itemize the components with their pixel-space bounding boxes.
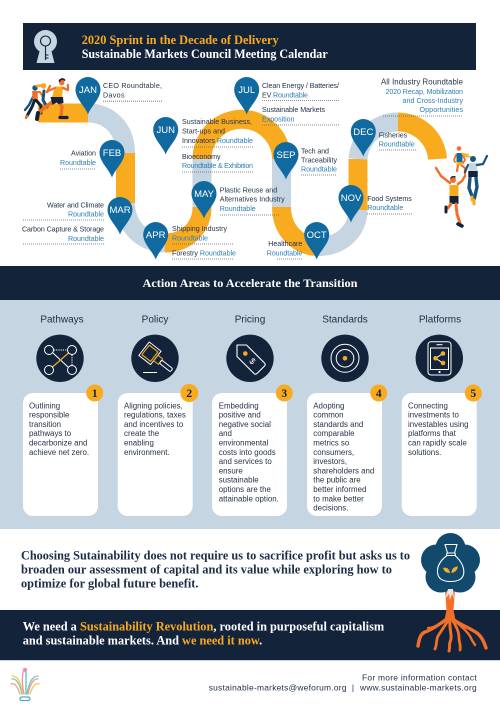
icon: keyhole with key (34, 30, 57, 63)
card text: investments to (408, 411, 459, 420)
pin: FEB: FEB (103, 148, 121, 159)
logo: plume emblem (11, 670, 39, 700)
label: June: Sustainable Business, (182, 118, 252, 126)
card text: environment. (124, 448, 170, 457)
card text: metrics so (313, 438, 350, 448)
label: June (182, 118, 253, 172)
card text: comparable (313, 429, 355, 438)
section band: action areas (0, 266, 500, 300)
card text: standards and (313, 420, 363, 429)
pin: OCT (304, 222, 329, 260)
label: March: Roundtable (68, 235, 104, 243)
column: Pathways (23, 315, 103, 516)
card text: investors, (313, 457, 347, 466)
pin: OCT: OCT (307, 230, 327, 241)
card text: to make better (313, 494, 364, 503)
label: March: Carbon Capture & Storage (22, 226, 104, 234)
month pins (76, 77, 376, 260)
label: July (262, 82, 339, 125)
label: March: Roundtable (68, 211, 104, 219)
label: July: Sustainable Markets (262, 106, 325, 114)
label: all industry roundtable: and Cross-Industry (402, 97, 463, 105)
column: Policy: Policy (142, 315, 168, 326)
illustration: runners at start (25, 79, 68, 119)
label: November: Roundtable (367, 204, 403, 212)
card text: Outlining (29, 401, 60, 410)
label: December: Fisheries (379, 132, 408, 140)
card (307, 393, 382, 516)
pin: JUL (234, 77, 259, 114)
label: December: Roundtable (379, 141, 415, 149)
column: Platforms (402, 315, 482, 516)
label: January (103, 82, 163, 101)
label: September: Roundtable (301, 166, 337, 174)
card text: platforms that (408, 429, 457, 438)
subtitle: Sustainable Markets Council Meeting Calendar (82, 46, 328, 61)
label: March: Water and Climate (47, 201, 104, 209)
number badge (370, 384, 387, 402)
label: July: Clean Energy / Batteries/ (262, 82, 339, 90)
number badge (465, 384, 482, 402)
header banner (23, 23, 476, 70)
label: September: Tech and (301, 147, 329, 155)
pin: MAY (192, 181, 216, 218)
card text: and (219, 429, 232, 438)
statement text: broaden our assessment of capital and its value while exploring how to (21, 562, 392, 576)
label: April: Roundtable (172, 234, 208, 242)
pin: DEC (351, 119, 376, 156)
card text: Adopting (313, 401, 344, 410)
title: 2020 Sprint in the Decade of Delivery (82, 32, 279, 47)
card text: environmental (219, 438, 269, 448)
column: Standards: Standards (322, 315, 368, 326)
footer contact: www.sustainable-markets.org (359, 683, 477, 693)
card text: positive and (219, 411, 261, 420)
label: June: Roundtable & Exhibition (182, 162, 253, 170)
pin: MAR (108, 197, 132, 234)
pin: DEC: DEC (353, 127, 373, 138)
card text: sustainable (219, 476, 259, 485)
label: February: Roundtable (60, 159, 96, 167)
card text: costs into goods (219, 448, 276, 457)
card text: decarbonize and (29, 438, 87, 448)
card text: Connecting (408, 401, 448, 410)
label: January: Davos (103, 92, 125, 100)
pin: MAY: MAY (194, 189, 215, 200)
label: all industry roundtable: 2020 Recap, Mobilization (386, 88, 463, 96)
label: February: Aviation (71, 150, 96, 158)
canopy (421, 533, 480, 592)
card text: Embedding (219, 401, 259, 410)
label: all industry roundtable (381, 78, 463, 116)
statement text (21, 548, 410, 590)
statement text: optimize for global future benefit. (21, 576, 198, 590)
card (212, 393, 287, 516)
card text: attainable option. (219, 494, 279, 503)
label: May (220, 186, 285, 215)
icon: price tag: $ (247, 356, 258, 366)
card text: pathways to (29, 429, 72, 438)
label: May: Roundtable (220, 205, 256, 213)
footer contact: | (352, 683, 354, 693)
statement text: Choosing Sutainability does not require us to sacrifice profit but asks us to (21, 548, 410, 562)
label: all industry roundtable: All Industry Roundtable (381, 78, 463, 87)
illustration: finishing runners (436, 146, 487, 226)
column: Pricing: Pricing (235, 315, 265, 326)
card text: consumers, (313, 448, 354, 457)
pin: NOV: NOV (341, 193, 362, 204)
pin: JUN (153, 117, 178, 154)
number badge: 3 (281, 388, 287, 400)
card text: and services to (219, 457, 272, 466)
label: May: Alternatives Industry (220, 196, 285, 204)
pin: APR (143, 222, 168, 260)
milestone labels (22, 78, 463, 259)
card text: can rapidly scale (408, 438, 467, 448)
label: October: Healthcare (268, 240, 302, 248)
card text: common (313, 411, 344, 420)
call to action text: We need a Sustainability Revolution, rooted in purposeful capitalism (23, 619, 384, 634)
card (118, 393, 193, 516)
card text: and incentives to (124, 420, 184, 429)
footer contact (209, 672, 477, 693)
pin: JAN (76, 77, 100, 114)
footer contact: For more information contact (362, 672, 477, 682)
label: November (367, 195, 412, 214)
illustration: money tree (418, 533, 486, 651)
label: June: Innovators Roundtable (182, 137, 253, 145)
label: June: Start-ups and (182, 128, 225, 136)
pin: JAN: JAN (79, 85, 97, 96)
pin: JUN: JUN (156, 125, 175, 136)
call to action text (23, 619, 384, 648)
card text: transition (29, 420, 61, 429)
panel: action areas (0, 300, 500, 529)
label: September (301, 147, 337, 175)
card text: create the (124, 429, 160, 438)
card text: options are the (219, 485, 272, 494)
icon: money bag (437, 544, 464, 582)
card text: the public are (313, 476, 361, 485)
label: April: Forestry Roundtable (172, 249, 236, 257)
number badge: 5 (470, 388, 476, 400)
pin: JUL: JUL (238, 85, 255, 96)
column: Pricing (212, 315, 293, 516)
number badge (180, 384, 198, 402)
section heading: Action Areas to Accelerate the Transition (142, 278, 358, 290)
column: Policy (118, 315, 198, 516)
card text: regulations, taxes (124, 411, 186, 420)
pin: APR: APR (146, 230, 166, 241)
footer contact: sustainable-markets@weforum.org (209, 683, 347, 693)
number badge (276, 384, 293, 402)
card text: ensure (219, 466, 243, 475)
card text: investables using (408, 420, 469, 429)
icon: gavel (131, 335, 179, 382)
card text: decisions. (313, 504, 348, 513)
pin: SEP: SEP (276, 150, 296, 161)
label: July: Exposition (262, 116, 295, 124)
pin: MAR: MAR (109, 205, 131, 216)
card (402, 393, 477, 516)
icon: pathways network (36, 335, 84, 382)
call to action band (0, 610, 500, 661)
card text: responsible (29, 411, 70, 420)
card text: shareholders and (313, 466, 374, 475)
icon: price tag (226, 335, 274, 382)
timeline road (38, 113, 438, 246)
number badge: 2 (186, 388, 192, 400)
label: January: CEO Roundtable, (103, 82, 162, 90)
roots (418, 590, 486, 651)
icon: phone sharing (416, 335, 463, 382)
column: Standards (307, 315, 387, 516)
pin: SEP (274, 142, 298, 180)
label: June: Bioeconomy (182, 153, 221, 161)
label: April: Shipping Industry (172, 225, 227, 233)
column: Pathways: Pathways (40, 315, 84, 326)
label: May: Plastic Reuse and (220, 186, 277, 194)
card text: enabling (124, 438, 154, 448)
label: December (379, 132, 416, 150)
number badge: 1 (92, 388, 98, 400)
pin: NOV (338, 185, 364, 222)
label: February (60, 150, 96, 169)
call to action text: and sustainable markets. And we need it now. (23, 633, 262, 648)
label: September: Traceability (301, 157, 337, 165)
pin: FEB (100, 140, 124, 178)
label: November: Food Systems (367, 195, 412, 203)
label: March (22, 201, 104, 244)
card text: Aligning policies, (124, 401, 183, 410)
card text: better informed (313, 485, 366, 494)
label: October: Roundtable (267, 249, 302, 257)
label: all industry roundtable: Opportunities (420, 106, 463, 114)
number badge: 4 (376, 388, 382, 400)
icon: target (321, 335, 369, 382)
card text: solutions. (408, 448, 441, 457)
label: July: EV Roundtable (262, 92, 308, 100)
card text: achieve net zero. (29, 448, 89, 457)
label: April (172, 225, 236, 259)
card (23, 393, 98, 516)
card text: negative social (219, 420, 271, 429)
label: October (267, 240, 302, 259)
number badge (86, 384, 103, 402)
column: Platforms: Platforms (419, 315, 461, 326)
